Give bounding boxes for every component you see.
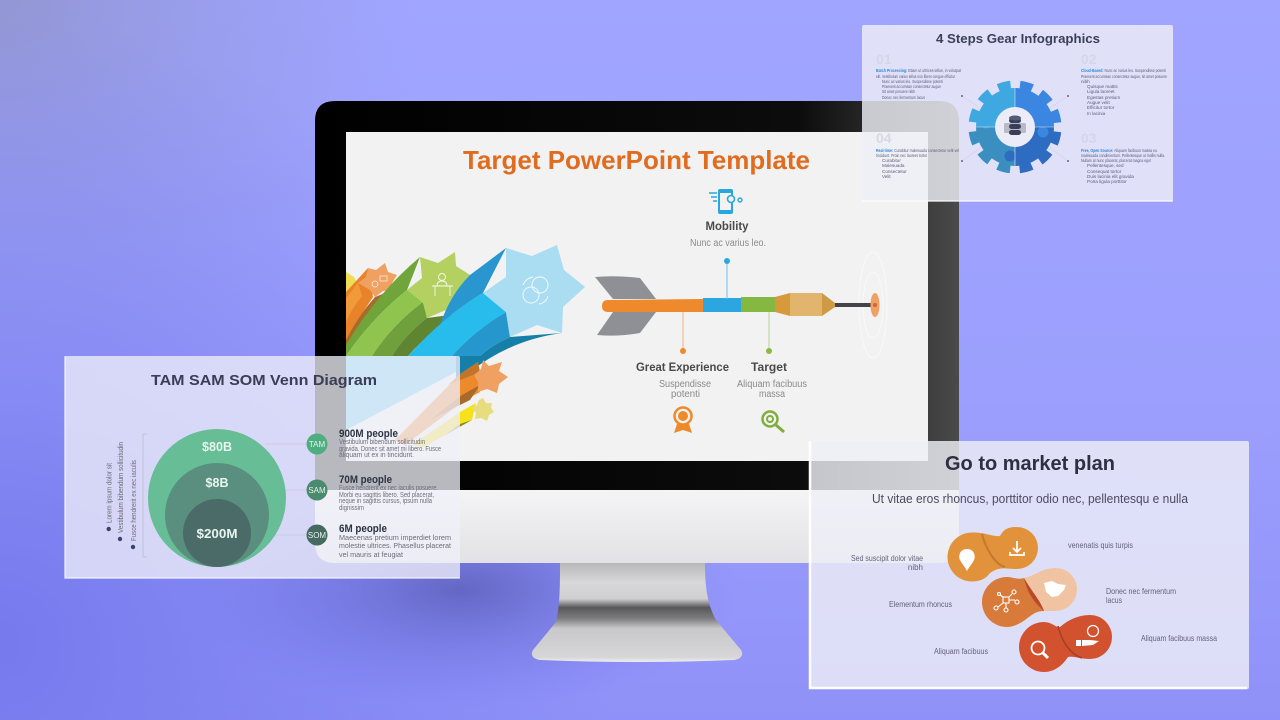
icon: hand with coin [1076,626,1099,646]
star icon: money [523,277,548,304]
icon: download [1010,541,1024,555]
shooting stars illustration [346,245,585,447]
icon: location pin [959,549,975,571]
step 02 [1081,51,1167,116]
step 01: elit. Vestibulum varius tellus non libero congue efficitur [876,74,955,79]
icon: mobile phone [709,189,742,214]
connector lines [262,444,307,535]
SAM row: 70M people [339,474,392,486]
dart needle [835,303,873,307]
SOM row: Maecenas pretium imperdiet lorem [339,535,451,542]
TAM row: 900M people [339,428,398,440]
screen: slide [346,132,928,461]
blob labels [851,541,1217,656]
step 02: In lacinia [1087,111,1106,116]
blob labels: nibh [908,563,923,572]
dart barrel [775,293,835,316]
SOM row: vel mauris at feugiat [339,552,403,559]
dart shaft [602,297,775,312]
TAM row [306,428,441,459]
blob labels: Elementum rhoncus [889,600,952,609]
gear heading: 4 Steps Gear Infographics [936,31,1100,46]
icon: network [994,590,1019,612]
dart [595,252,887,358]
blob: bottom red [1019,615,1112,672]
gear connectors [961,95,1069,162]
callout: mobility: Nunc ac varius leo. [690,238,766,249]
SAM row [306,474,438,512]
step 03: Free, Open Source: Aliquam facibuus massa eu [1081,148,1157,153]
blob labels: Aliquam facibuus [934,647,988,656]
rotated list [106,434,147,557]
step 02: nibh [1081,79,1090,84]
icon: magnifier [1032,642,1048,658]
rotated list: Lorem ipsum dolor sit [106,463,114,523]
step 03: Duis lacinia elit gravida [1087,174,1134,179]
rotated list: Fusce hendrerit ex nec iaculis [131,460,138,541]
SAM row: neque in sagittis cursus, ipsum nulla [339,498,432,505]
step 02: Augue velit [1087,100,1110,105]
step 01: Donec nec fermentum lacus [882,95,926,100]
SAM row: dignissim [339,505,364,512]
star icon: chart [372,276,387,287]
callout: mobility: Mobility [706,219,749,233]
venn circles: $8B [206,475,228,490]
dart flights [595,276,656,299]
step 04 [876,130,959,179]
monitor stand [532,563,742,662]
market heading: Go to market plan [945,453,1115,475]
step 02: Efficitur tortor [1087,105,1115,110]
blob labels: venenatis quis turpis [1068,541,1133,550]
panel: go to market plan [809,441,1249,689]
step 01: Sit amet posuere nibh [882,89,915,94]
callout: great experience: Great Experience [636,360,729,374]
blob labels: Aliquam facibuus massa [1141,634,1217,643]
step 03: Consequat tortor [1087,169,1122,174]
step 04: Real-time: Curabitur malesuada consectetur velit vel [876,148,959,153]
blob labels: Sed suscipit dolor vitae [851,554,923,563]
step 01 [876,51,962,100]
step 04: Curabitur [882,158,901,163]
step 01: 01 [876,51,892,67]
step 01: Nunc ac varius leo. Suspendisse potenti [882,79,943,84]
SOM row [306,523,451,559]
icon: award badge [674,408,692,433]
venn circles: $80B [202,439,232,454]
callout: target [737,312,807,432]
bullseye [870,293,880,317]
SAM row: Fusce hendrerit ex nec iaculis posuere. [339,485,438,492]
step 02: Ligula laoreet [1087,89,1115,94]
venn heading: TAM SAM SOM Venn Diagram [151,372,377,389]
blob labels: lacus [1106,596,1122,605]
step 03: Porta ligula porttitor [1087,179,1127,184]
blob: middle orange [982,568,1077,627]
monitor chin [315,490,959,563]
step 04: Velit [882,174,891,179]
step 01: Batch Processing: Etiam ut ultrices tellus, in volutpat [876,68,962,73]
callout: great experience: potenti [671,389,700,400]
step 04: tincidunt. Proin nec laoreet tortor [876,153,927,158]
TAM row: TAM [309,440,325,449]
step 04: Malesuada [882,163,905,168]
SAM row: SAM [308,486,326,495]
rotated list: Vestibulum bibendum sollicitudin [118,442,125,533]
SAM row: Morbi eu sagittis libero. Sed placerat, [339,492,434,499]
step 01: Praesent accumsan consectetur augue [882,84,941,89]
step 02: Egestas pretium [1087,95,1120,100]
icon: magnifier target [762,412,784,432]
icon: database [1004,116,1026,135]
SOM row: molestie ultrices. Phasellus placerat [339,543,451,550]
venn circles: $200M [196,526,238,541]
monitor bezel [315,101,959,490]
slide title: Target PowerPoint Template [463,145,810,175]
star icon: presenter [432,274,453,296]
callout: target: Aliquam facibuus [737,379,807,390]
SOM row: SOM [308,531,326,540]
blob: top orange [948,527,1038,582]
callout: great experience [636,312,729,433]
venn circles [148,429,286,567]
step 02: Cloud-Based: Nunc ac varius leo. Suspendisse potenti [1081,68,1166,73]
step 03: malesuada condimentum. Pellentesque ut mollis nulla. [1081,153,1165,158]
TAM row: aliquam ut ex in tincidunt. [339,452,414,459]
icon: handshake [1044,581,1066,597]
market subtitle: Ut vitae eros rhoncus, porttitor odio nec, pellentesqu e nulla [872,492,1188,506]
TAM row: gravida. Donec sit amet mi libero. Fusce [339,446,441,453]
callout: great experience: Suspendisse [659,379,711,390]
step 04: 04 [876,130,892,146]
step 03: Pellentesque, sed [1087,163,1124,168]
panel: TAM SAM SOM venn diagram [65,356,460,578]
target rings [859,252,887,358]
step 03: 03 [1081,130,1097,146]
TAM row: Vestibulum bibendum sollicitudin [339,439,425,446]
step 02: 02 [1081,51,1097,67]
step 03 [1081,130,1165,184]
callout: target: massa [759,389,785,400]
callout: mobility [690,189,766,299]
panel: 4 steps gear infographics [862,25,1173,201]
monitor [315,101,959,563]
blob labels: Donec nec fermentum [1106,587,1176,596]
step 02: Praesent accumsan consectetur augue, sit amet posuere [1081,74,1167,79]
step 03: Nullam at nunc placerat, placerat magna eget [1081,158,1152,163]
SOM row: 6M people [339,523,387,535]
step 02: Quisque mattis [1087,84,1118,89]
callout: target: Target [751,360,787,374]
gear diagram [973,85,1057,169]
step 04: Consectetur [882,169,907,174]
